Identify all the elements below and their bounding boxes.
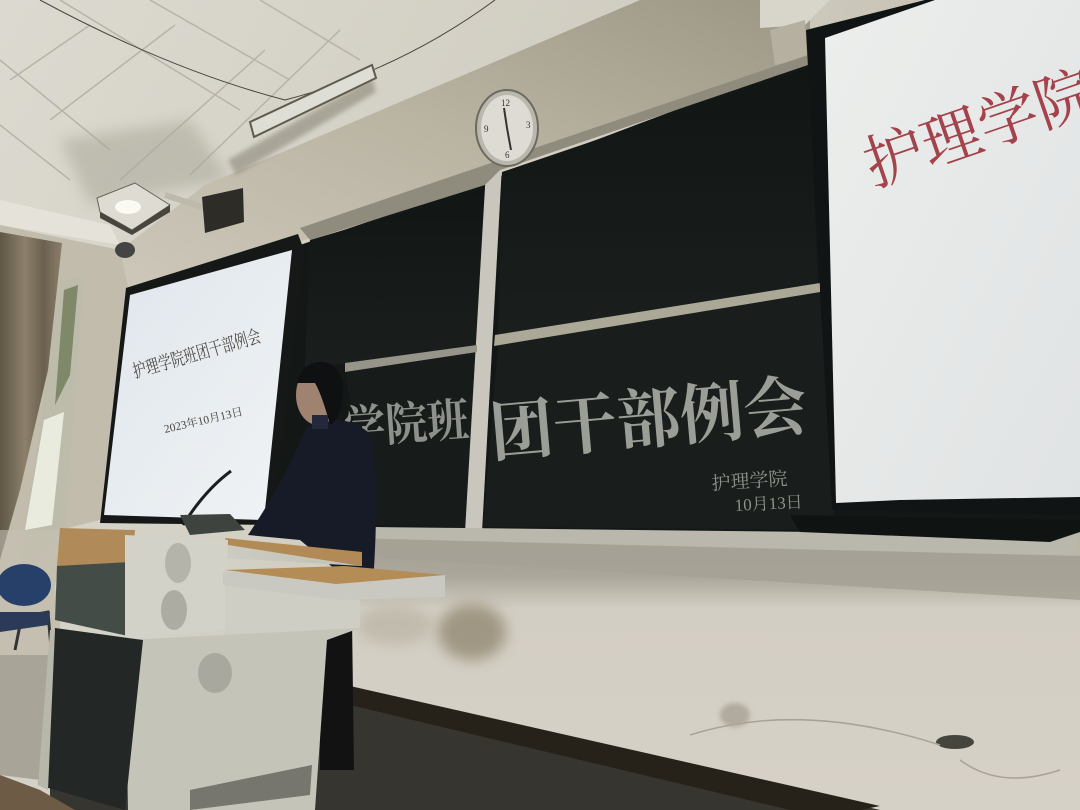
microphone: [183, 471, 231, 525]
wall clock: 12: [501, 98, 510, 108]
left screen date: 2023年10月13日: [163, 404, 244, 436]
curtain: [0, 232, 62, 560]
chalk title on blackboard: 学院班: [342, 394, 470, 454]
wall clock: 9: [484, 124, 489, 134]
window: [20, 278, 84, 570]
chalk title on blackboard: 团干部例会: [487, 371, 810, 471]
chalk title on blackboard: 10月13日: [734, 492, 803, 515]
wall clock: 3: [526, 120, 531, 130]
wall clock: [476, 90, 538, 166]
security camera: [115, 242, 135, 258]
device on lectern: [180, 514, 245, 535]
fluorescent lamp: [228, 65, 376, 175]
lectern: [38, 528, 445, 810]
upper wall: [120, 0, 810, 295]
projector: [97, 183, 205, 235]
chalk title on blackboard: [342, 371, 810, 515]
blackboard: [270, 0, 1080, 556]
left wall: [0, 225, 130, 660]
skirting and floor: [0, 655, 880, 810]
wall speaker box: [202, 188, 244, 233]
chalk title on blackboard: 护理学院: [711, 468, 788, 495]
presenter: [248, 362, 376, 770]
left screen title: 护理学院班团干部例会: [131, 326, 263, 383]
wall clock: 6: [505, 150, 510, 160]
left projection screen: [100, 234, 304, 525]
lower wall: [345, 538, 1080, 810]
right projection screen: [806, 0, 1080, 515]
blue chair: [0, 530, 60, 660]
